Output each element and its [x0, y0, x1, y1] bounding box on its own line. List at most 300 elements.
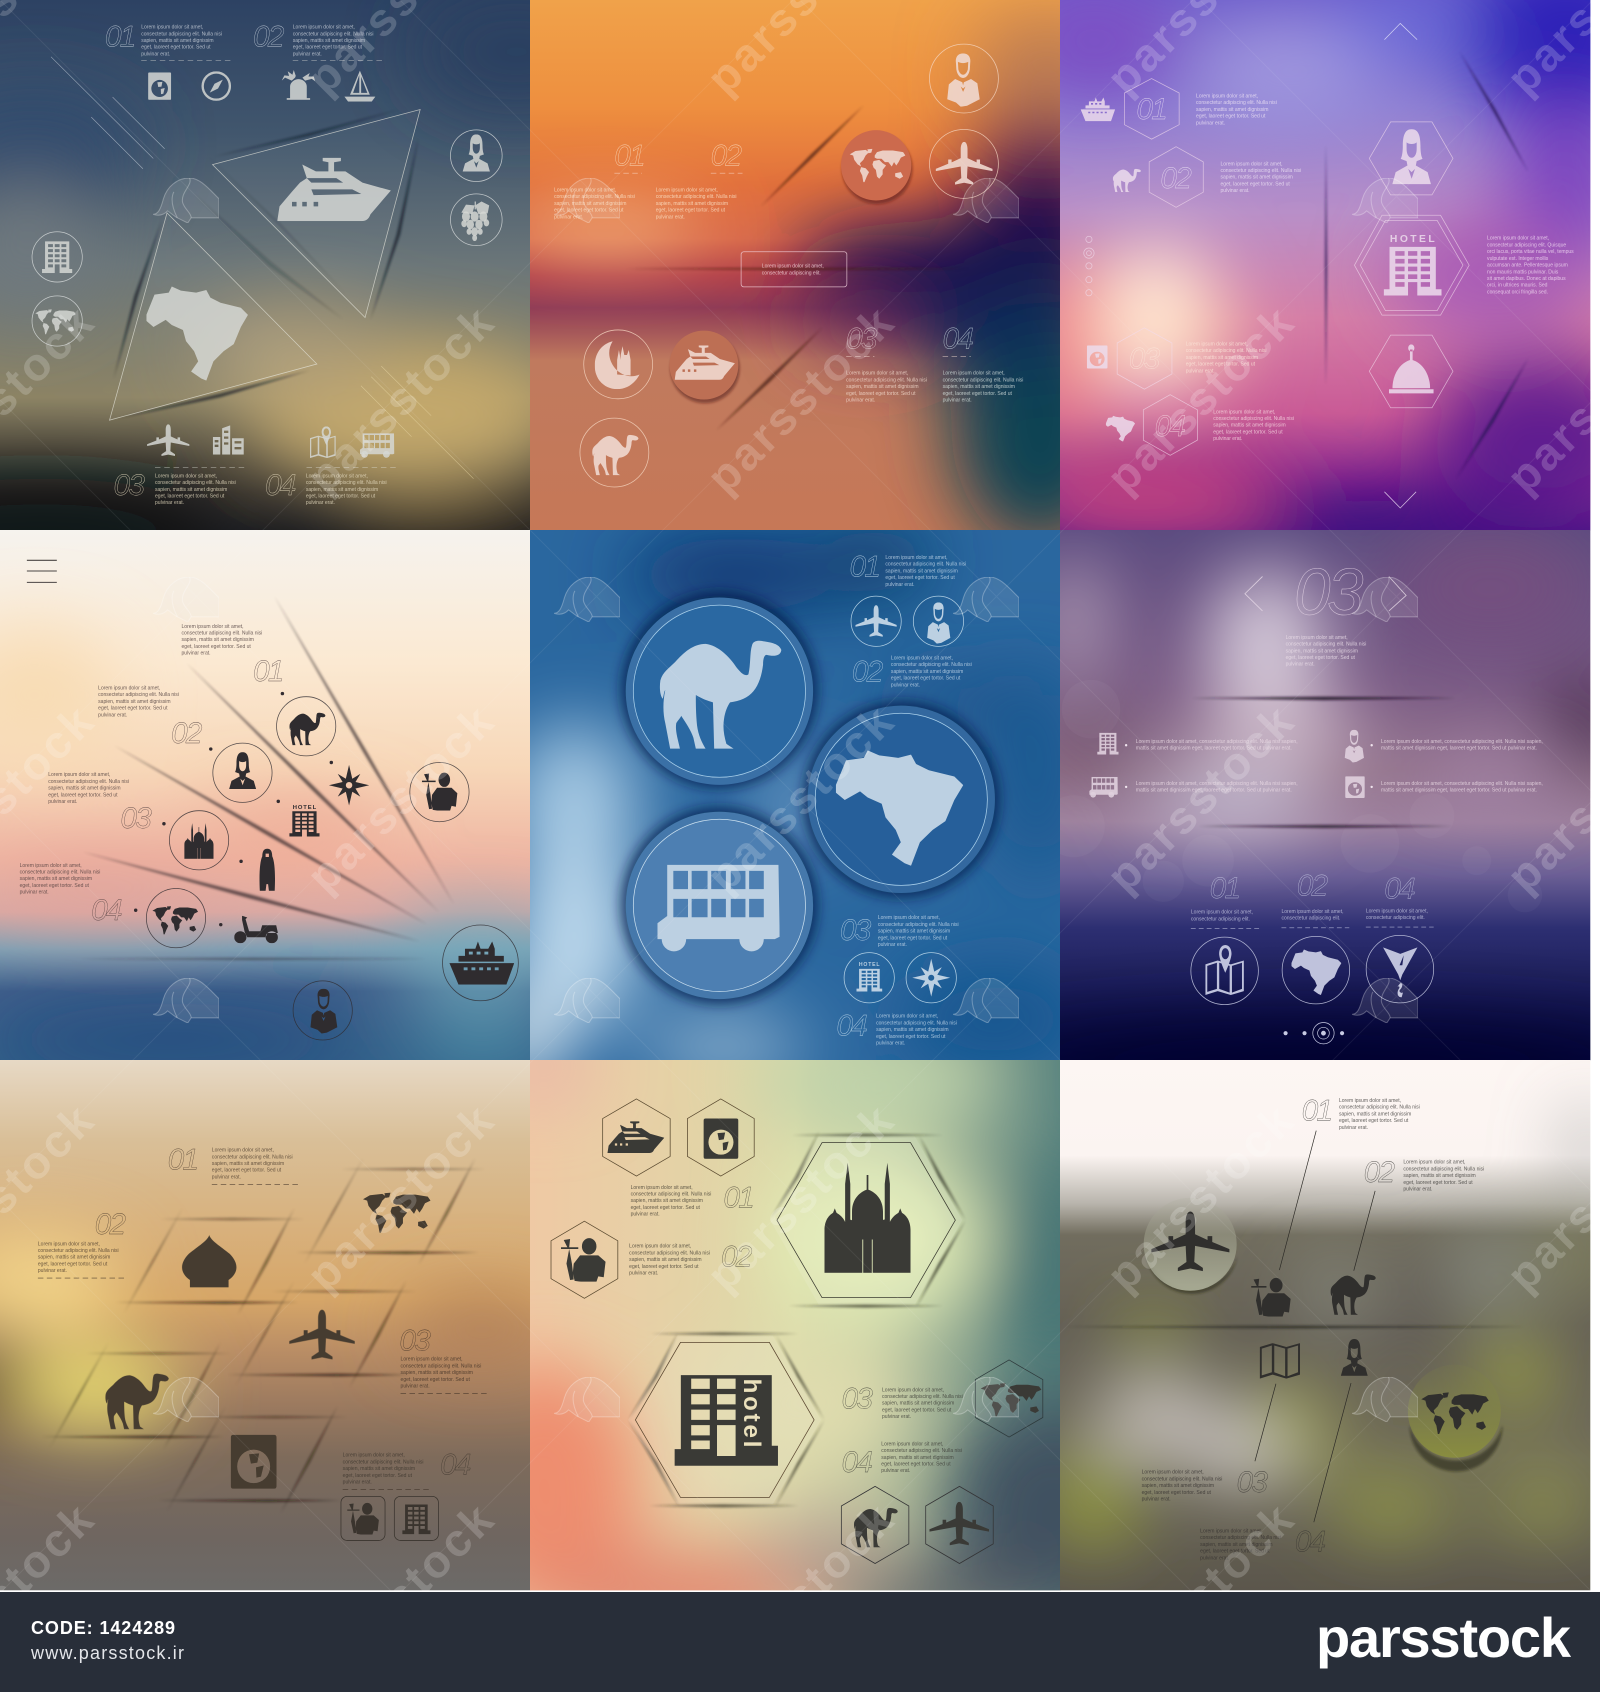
icon: camel [1331, 1274, 1376, 1315]
footer bar [0, 1592, 1600, 1692]
step 03: 03 [1237, 1466, 1268, 1499]
step 04: eget, laoreet eget tortor. Sed ut [881, 1461, 951, 1468]
step 02: pulvinar erat. [891, 682, 920, 689]
step 03: consectetur adipiscing elit. Nulla nisi [1142, 1476, 1222, 1482]
icon: hotel building [675, 1375, 778, 1466]
icon: compass star [912, 959, 950, 997]
step 01: sapien, mattis sit amet dignissim [212, 1161, 285, 1167]
list item text: mattis sit amet dignissim eget, laoreet eget tortor. Sed ut pulvinar erat. [1136, 787, 1292, 794]
icon: world [35, 309, 76, 334]
step 01: consectetur adipiscing elit. Nulla nisi [554, 194, 635, 200]
long text block [1487, 235, 1574, 296]
icons and labels [35, 70, 490, 458]
icon: yacht [277, 158, 391, 221]
icon: compass [201, 71, 231, 101]
panel: pastel hexagons [447, 1032, 1157, 1645]
step 01 [1136, 93, 1277, 126]
step 02: Lorem ipsum dolor sit amet, [293, 24, 355, 31]
icon: dome [1389, 344, 1434, 393]
step 02: 02 [1364, 1156, 1396, 1189]
step 01: Lorem ipsum dolor sit amet, [1196, 93, 1259, 100]
intro text: consectetur adipiscing elit. Nulla nisi [1286, 641, 1366, 648]
step 01: Lorem ipsum dolor sit amet, [631, 1185, 693, 1191]
step 01: eget, laoreet eget tortor. Sed ut [1196, 113, 1266, 120]
panel background [0, 1060, 565, 1590]
large number: 03 [1294, 555, 1363, 628]
pagination dots [1084, 236, 1094, 296]
icon: camel [105, 1374, 169, 1429]
step 02: eget, laoreet eget tortor. Sed ut [293, 44, 363, 51]
list item text: Lorem ipsum dolor sit amet, consectetur adipiscing elit. Nulla nisi sapien, [1136, 781, 1298, 787]
icon: cruise ship [449, 942, 514, 985]
icon: hotel [289, 811, 320, 837]
step 03 [114, 469, 236, 506]
step 02: pulvinar erat. [1403, 1186, 1433, 1193]
step 01: pulvinar erat. [885, 582, 915, 588]
step 03: pulvinar erat. [846, 397, 876, 404]
step 03 [48, 772, 152, 835]
icon: camel [854, 1508, 898, 1547]
icon rings [32, 130, 502, 346]
slits [623, 105, 971, 431]
step 03 [840, 914, 959, 948]
icon: bus [657, 865, 780, 951]
step 02 [852, 655, 972, 689]
icons [152, 713, 514, 1034]
step 04: consectetur adipiscing elit. [1366, 915, 1425, 921]
step 04: pulvinar erat. [343, 1479, 372, 1486]
panel: purple hexagons [1005, 0, 1600, 575]
icon: sailboat [344, 71, 375, 102]
chevron up [1384, 23, 1417, 40]
step 04: eget, laoreet eget tortor. Sed ut [343, 1473, 412, 1479]
step 01: sapien, mattis sit amet dignissim [141, 38, 214, 44]
step 02: Lorem ipsum dolor sit amet, [629, 1243, 692, 1250]
icon: waiter [561, 1238, 606, 1282]
icon: map [1205, 960, 1244, 995]
panel: triangles [0, 0, 530, 530]
hotel sign: HOTEL [293, 805, 317, 811]
watermark overlay: parsstock [1096, 296, 1303, 503]
step 03: sapien, mattis sit amet dignissim [1142, 1483, 1214, 1489]
step 01: eget, laoreet eget tortor. Sed ut [885, 575, 955, 581]
icon: woman [463, 134, 490, 172]
step 01 [850, 550, 966, 588]
step 04: Lorem ipsum dolor sit amet, [306, 473, 368, 479]
step 01: Lorem ipsum dolor sit amet, [1191, 909, 1253, 916]
step 02: Lorem ipsum dolor sit amet, [1220, 161, 1283, 167]
step 01: consectetur adipiscing elit. Nulla nisi [141, 31, 222, 37]
icon: world [981, 1383, 1041, 1416]
step 03: sapien, mattis sit amet dignissim [882, 1400, 955, 1407]
icon rings [146, 697, 518, 1040]
step 02: Lorem ipsum dolor sit amet, [38, 1241, 100, 1247]
step 01: consectetur adipiscing elit. Nulla nisi [212, 1154, 293, 1160]
step 01: sapien, mattis sit amet dignissim [885, 568, 958, 575]
step 04: consectetur adipiscing elit. Nulla nisi [876, 1020, 957, 1027]
icon: passport [231, 1435, 277, 1489]
step 02: eget, laoreet eget tortor. Sed ut [629, 1264, 699, 1270]
step 01: 01 [105, 20, 135, 53]
step 01: 01 [614, 139, 644, 172]
step 03: consectetur adipiscing elit. Nulla nisi [48, 779, 129, 785]
diagonal accent lines [51, 57, 165, 169]
step 02: 02 [711, 139, 743, 172]
step 02 [98, 685, 203, 750]
ray shadows [79, 595, 455, 960]
step 02: 02 [171, 717, 203, 750]
icons [561, 1119, 1041, 1547]
step 04: 04 [1155, 410, 1185, 443]
icons [1151, 1212, 1489, 1434]
step 02: consectetur adipiscing elit. Nulla nisi [891, 662, 972, 668]
intro text [1286, 635, 1366, 668]
disc shadows [621, 591, 1000, 1004]
parallelogram shadows [41, 1158, 486, 1513]
icon: moon mosque [595, 341, 640, 389]
icon: Brazil [836, 750, 963, 866]
step 02: pulvinar erat. [656, 214, 685, 220]
step 03: pulvinar erat. [878, 942, 907, 948]
step 04: 04 [1384, 873, 1415, 906]
panel background [509, 0, 1129, 551]
step 01: pulvinar erat. [554, 214, 584, 220]
step 03: eget, laoreet eget tortor. Sed ut [1186, 361, 1255, 368]
step 01: eget, laoreet eget tortor. Sed ut [141, 44, 211, 51]
step 02: Lorem ipsum dolor sit amet, [98, 685, 161, 692]
step 01: 01 [724, 1181, 753, 1214]
step 02: eget, laoreet eget tortor. Sed ut [1403, 1180, 1473, 1186]
icon: plane [930, 1502, 989, 1545]
icon: woman [229, 752, 256, 789]
long text block: orci lacus, porta vitae nulla vel, tempus [1487, 249, 1574, 255]
icons [1089, 730, 1365, 798]
step 02: consectetur adipiscing elit. Nulla nisi [1220, 168, 1301, 174]
step 01: consectetur adipiscing elit. Nulla nisi [631, 1191, 711, 1198]
step 01: consectetur adipiscing elit. Nulla nisi [181, 630, 262, 637]
disc: world [1408, 1365, 1503, 1472]
icon: hotel [1384, 247, 1442, 295]
step 04: sapien, mattis sit amet dignissim [20, 876, 92, 882]
icon: bus [1089, 777, 1118, 798]
step 04: Lorem ipsum dolor sit amet, [1200, 1528, 1263, 1535]
step 01: 01 [253, 655, 283, 688]
step 01: eget, laoreet eget tortor. Sed ut [554, 207, 624, 214]
divider slit [1063, 1326, 1525, 1328]
step 02: pulvinar erat. [293, 51, 322, 58]
icon rings [1191, 935, 1434, 1005]
icon: Brazil [1291, 949, 1341, 995]
icon: mosque [824, 1163, 911, 1273]
icon: cruise ship [1081, 97, 1115, 121]
icon: hotel [1097, 733, 1119, 755]
icon: plane [289, 1310, 355, 1359]
step 03: consectetur adipiscing elit. Nulla nisi [155, 480, 236, 486]
step 04: consectetur adipiscing elit. Nulla nisi [343, 1459, 423, 1466]
step 02 [253, 20, 374, 58]
step 01: eget, laoreet eget tortor. Sed ut [631, 1205, 700, 1211]
icon: map [310, 436, 336, 458]
step 04: eget, laoreet eget tortor. Sed ut [1213, 429, 1283, 436]
callout: Lorem ipsum dolor sit amet, [762, 263, 824, 270]
step 02: consectetur adipiscing elit. Nulla nisi [656, 194, 736, 200]
step 03: Lorem ipsum dolor sit amet, [48, 772, 111, 778]
icon: pin [1219, 945, 1232, 973]
step 02: Lorem ipsum dolor sit amet, [656, 187, 718, 194]
step 01: Lorem ipsum dolor sit amet, [554, 187, 617, 194]
step 04: sapien, mattis sit amet dignissim [876, 1027, 949, 1033]
step 02: sapien, mattis sit amet dignissim [891, 669, 964, 675]
step 04: pulvinar erat. [1213, 436, 1243, 442]
step 01: 01 [1302, 1094, 1331, 1127]
step 03: sapien, mattis sit amet dignissim [846, 384, 919, 390]
step 01: Lorem ipsum dolor sit amet, [212, 1147, 274, 1154]
step 04: eget, laoreet eget tortor. Sed ut [876, 1034, 946, 1040]
step 04: eget, laoreet eget tortor. Sed ut [943, 391, 1012, 397]
website: www.parsstock.ir [30, 1643, 184, 1663]
icons [592, 53, 993, 475]
panel: violet bokeh [977, 530, 1600, 1102]
step 01: 01 [850, 550, 879, 583]
step 01 [1191, 872, 1253, 923]
hexagon outlines [1117, 79, 1469, 455]
step 02: eget, laoreet eget tortor. Sed ut [1220, 181, 1290, 188]
disc: world [841, 130, 913, 204]
step 01: sapien, mattis sit amet dignissim [1196, 107, 1269, 113]
step 04: consectetur adipiscing elit. Nulla nisi [881, 1448, 962, 1454]
step 01: sapien, mattis sit amet dignissim [554, 201, 627, 207]
step 04: sapien, mattis sit amet dignissim [1213, 422, 1286, 429]
step 01: pulvinar erat. [1196, 120, 1226, 126]
step 01 [168, 1144, 293, 1181]
step 03: pulvinar erat. [48, 799, 78, 805]
step 04: consectetur adipiscing elit. Nulla nisi [1213, 416, 1294, 422]
chevron right [1389, 576, 1406, 611]
step 03: sapien, mattis sit amet dignissim [1186, 355, 1259, 361]
icon: woman [1341, 1339, 1368, 1376]
icon: plane [855, 605, 897, 637]
icon: compass arrow [1383, 947, 1417, 997]
step 04 [265, 469, 387, 506]
icon: mosque [184, 823, 214, 859]
bottom icons [1205, 945, 1417, 997]
icon: world [850, 149, 905, 182]
icon: map card [148, 72, 171, 100]
icon: plane [1151, 1212, 1229, 1271]
step 04: 04 [837, 1010, 867, 1043]
step 04: pulvinar erat. [881, 1468, 911, 1474]
panel background [485, 527, 1091, 1088]
step 03: Lorem ipsum dolor sit amet, [846, 370, 909, 377]
long text block: vulputate est. Integer mollis [1487, 256, 1549, 262]
step 02: 02 [253, 20, 285, 53]
connector lines [1255, 1131, 1375, 1522]
icon: hotel [42, 241, 72, 273]
step 04 [943, 323, 1023, 404]
step 03: eget, laoreet eget tortor. Sed ut [401, 1377, 470, 1383]
panel background [1005, 0, 1600, 575]
step 04: pulvinar erat. [306, 500, 335, 506]
step 01: consectetur adipiscing elit. [1191, 916, 1250, 923]
step 01 [631, 1181, 753, 1218]
long text block: non mauris mattis pulvinar. Duis [1487, 269, 1559, 275]
step 02 [38, 1208, 126, 1274]
step 03: pulvinar erat. [1186, 368, 1215, 374]
pagination [1284, 1022, 1344, 1044]
step 02: consectetur adipiscing elit. Nulla nisi [293, 31, 374, 37]
step 01: eget, laoreet eget tortor. Sed ut [1339, 1118, 1409, 1124]
step 03: 03 [842, 1383, 873, 1416]
icon rings [580, 44, 998, 487]
icons [657, 602, 963, 997]
icons [105, 1193, 431, 1489]
panel background [447, 1032, 1157, 1645]
step 03: pulvinar erat. [155, 500, 184, 506]
step 03: sapien, mattis sit amet dignissim [155, 486, 228, 493]
step 01: eget, laoreet eget tortor. Sed ut [181, 644, 251, 650]
step 02: Lorem ipsum dolor sit amet, [1403, 1159, 1466, 1166]
step 01: pulvinar erat. [141, 51, 171, 58]
hexagon shadows [628, 1131, 966, 1508]
step 04: consectetur adipiscing elit. Nulla nisi [20, 869, 100, 876]
step 03: Lorem ipsum dolor sit amet, [882, 1387, 944, 1393]
disc: yacht [669, 331, 740, 403]
step 01: pulvinar erat. [212, 1174, 241, 1181]
step 03: 03 [114, 469, 145, 502]
watermark overlay: parsstock [696, 1094, 903, 1301]
icon: passport [704, 1119, 738, 1159]
panel: orange sunset [509, 0, 1129, 551]
icon: Brazil [1106, 416, 1135, 442]
step 04: eget, laoreet eget tortor. Sed ut [306, 493, 376, 500]
icon: grapes [461, 201, 489, 241]
icon: world [152, 906, 198, 934]
watermark overlay: parsstock [296, 1094, 503, 1301]
long text block: accumsan ante. Pellentesque ipsum [1487, 262, 1568, 269]
panel background [1050, 1060, 1600, 1590]
step 03: consectetur adipiscing elit. Nulla nisi [882, 1394, 963, 1400]
step 04: consectetur adipiscing elit. Nulla nisi [943, 377, 1023, 384]
step 04 [20, 863, 122, 927]
step 03: eget, laoreet eget tortor. Sed ut [846, 391, 916, 397]
icon: plane [936, 142, 993, 185]
panel background [0, 0, 530, 530]
step 03: 03 [840, 914, 872, 947]
step 03: consectetur adipiscing elit. Nulla nisi [878, 922, 959, 928]
step 02: eget, laoreet eget tortor. Sed ut [656, 207, 725, 214]
step 01: Lorem ipsum dolor sit amet, [141, 24, 204, 31]
step 03: consectetur adipiscing elit. Nulla nisi [401, 1363, 481, 1370]
disc: camel [626, 598, 813, 785]
icon: camel [592, 435, 638, 475]
icon: compass star [329, 765, 369, 806]
panel background [0, 530, 572, 1067]
step 01: 01 [1136, 93, 1166, 126]
step 01: sapien, mattis sit amet dignissim [181, 637, 254, 643]
icon: camel [660, 641, 781, 749]
step 01: Lorem ipsum dolor sit amet, [181, 624, 244, 630]
icon: onion dome [182, 1235, 236, 1287]
step 02: 02 [721, 1241, 753, 1274]
step 02: 02 [1161, 162, 1192, 195]
panel: amber parallelograms [0, 1060, 565, 1590]
logo wordmark: parsstock [1316, 1606, 1572, 1669]
step 03: Lorem ipsum dolor sit amet, [1142, 1469, 1204, 1476]
step 04: 04 [1295, 1525, 1326, 1558]
step 04: 04 [265, 469, 296, 502]
step 04: eget, laoreet eget tortor. Sed ut [20, 883, 89, 889]
icon: world [363, 1193, 431, 1233]
watermark overlay: parsstock [296, 296, 503, 503]
bokeh circles [1043, 680, 1542, 912]
icon: woman [1392, 129, 1431, 184]
step 02: consectetur adipiscing elit. Nulla nisi [629, 1250, 710, 1257]
step 04 [1366, 873, 1428, 921]
list item text: Lorem ipsum dolor sit amet, consectetur adipiscing elit. Nulla nisi sapien, [1136, 739, 1298, 745]
icon: yacht [675, 345, 735, 380]
step 03: 03 [1129, 343, 1161, 376]
step 02: pulvinar erat. [629, 1270, 659, 1277]
intro text: Lorem ipsum dolor sit amet, [1286, 635, 1348, 641]
step 04: 04 [91, 894, 122, 927]
step 02: 02 [1297, 870, 1329, 903]
step 04 [842, 1441, 962, 1479]
step 04: sapien, mattis sit amet dignissim [343, 1466, 415, 1472]
callout [741, 252, 847, 287]
icon: waiter [422, 773, 457, 811]
connector dots [134, 692, 333, 926]
slits [1191, 697, 1456, 828]
long text block: orci, in ultrices mauris. Sed [1487, 282, 1547, 289]
icon: world [1421, 1392, 1489, 1434]
intro text: sapien, mattis sit amet dignissim [1286, 648, 1358, 654]
list item text: Lorem ipsum dolor sit amet, consectetur adipiscing elit. Nulla nisi sapien, [1381, 739, 1543, 745]
watermark overlay: parsstock [1096, 695, 1303, 902]
panel background [977, 530, 1600, 1102]
step 03: eget, laoreet eget tortor. Sed ut [882, 1407, 952, 1414]
icon: scooter [234, 916, 278, 943]
list item text: Lorem ipsum dolor sit amet, consectetur adipiscing elit. Nulla nisi sapien, [1381, 781, 1543, 787]
big hexagon: hotel [628, 1336, 821, 1504]
list item text: mattis sit amet dignissim eget, laoreet eget tortor. Sed ut pulvinar erat. [1136, 745, 1292, 752]
step 02: consectetur adipiscing elit. Nulla nisi [38, 1248, 119, 1254]
icon: bus [360, 433, 394, 458]
step 01: Lorem ipsum dolor sit amet, [1339, 1098, 1401, 1104]
icon: man [1345, 730, 1364, 762]
step 01: Lorem ipsum dolor sit amet, [885, 555, 948, 561]
step 01: 01 [1210, 872, 1239, 905]
step 01: consectetur adipiscing elit. Nulla nisi [1196, 100, 1277, 106]
small hexagons [551, 1099, 1043, 1564]
step 04: Lorem ipsum dolor sit amet, [1213, 409, 1276, 415]
step 02: sapien, mattis sit amet dignissim [629, 1257, 702, 1263]
intro text: eget, laoreet eget tortor. Sed ut [1286, 655, 1355, 661]
step 02: eget, laoreet eget tortor. Sed ut [98, 705, 168, 712]
step 03: Lorem ipsum dolor sit amet, [1186, 341, 1248, 348]
step 02 [629, 1241, 753, 1277]
step 01 [1302, 1094, 1420, 1131]
step 02: eget, laoreet eget tortor. Sed ut [38, 1261, 108, 1268]
step 01: consectetur adipiscing elit. Nulla nisi [1339, 1104, 1420, 1111]
list item text [1136, 739, 1543, 794]
step 02 [1281, 870, 1344, 922]
step 03: 03 [400, 1324, 431, 1357]
intro text: pulvinar erat. [1286, 661, 1315, 668]
chevron left [1245, 576, 1263, 611]
icon rings [844, 596, 964, 1003]
step 03: sapien, mattis sit amet dignissim [48, 785, 121, 792]
icon: camel [1113, 169, 1141, 192]
